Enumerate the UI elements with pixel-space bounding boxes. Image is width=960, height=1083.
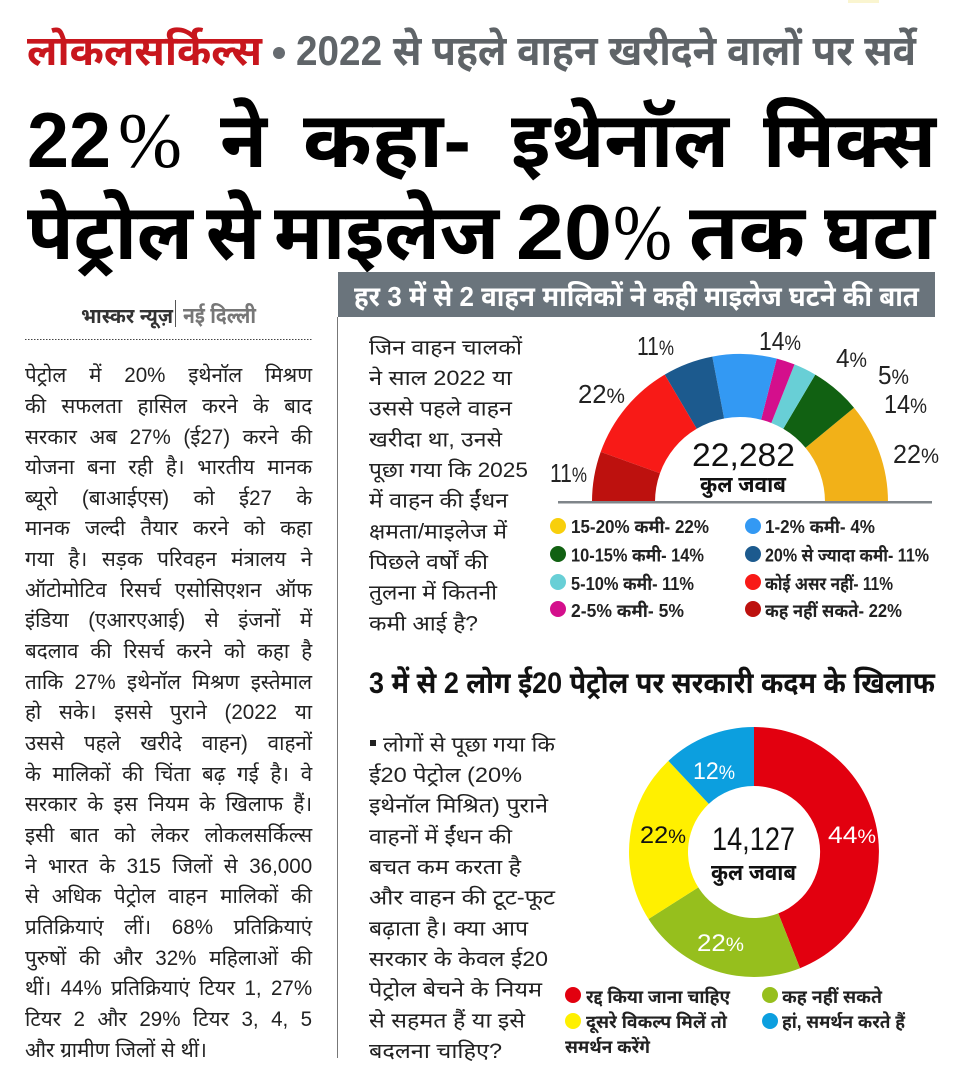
article body text: सरकार के इस नियम के खिलाफ हैं। <box>25 793 312 816</box>
article body text: पुरुषों की और 32% महिलाओं की <box>25 947 312 970</box>
main headline: इथेनॉल <box>511 96 730 184</box>
legend: mileage: कोई असर नहीं- 11% <box>765 573 893 594</box>
donut chart: कुल जवाब <box>711 860 796 886</box>
article body text: और ग्रामीण जिलों से थीं। <box>25 1039 207 1062</box>
semi-donut chart: कुल जवाब <box>700 472 786 498</box>
question text: E20: बढ़ाता है। क्या आप <box>369 915 529 940</box>
donut chart: 44% <box>828 822 876 849</box>
main headline: % <box>118 97 182 184</box>
byline: नई दिल्ली <box>183 303 256 328</box>
question text: mileage: पिछले वर्षों की <box>369 550 489 574</box>
kicker heading: लोकलसर्किल्स <box>27 27 263 74</box>
kicker heading: 2022 से पहले वाहन खरीदने वालों पर सर्वे <box>296 27 918 74</box>
legend: E20 <box>565 986 906 1057</box>
question text: E20: पेट्रोल बेचने के नियम <box>369 978 542 1002</box>
article body text: प्रतिक्रियाएं लीं। 68% प्रतिक्रियाएं <box>25 916 312 939</box>
byline <box>81 300 256 329</box>
main headline: से <box>206 188 261 276</box>
article body text: टियर 2 और 29% टियर 3, 4, 5 <box>25 1008 312 1031</box>
question text: E20 <box>369 732 556 1063</box>
question text: E20: और वाहन की टूट-फूट <box>369 886 555 911</box>
legend: mileage: कह नहीं सकते- 22% <box>765 600 902 621</box>
byline: भास्कर न्यूज़ <box>81 305 173 329</box>
question text: E20: वाहनों में ईंधन की <box>369 824 513 848</box>
article body text: इसी बात को लेकर लोकलसर्किल्स <box>25 824 312 847</box>
article body text: सरकार अब 27% (ई27) करने की <box>25 426 312 448</box>
question text: E20: बदलना चाहिए? <box>369 1039 502 1063</box>
semi-donut chart: 14% <box>884 389 927 419</box>
article body text: थीं। 44% प्रतिक्रियाएं टियर 1, 27% <box>25 977 312 1000</box>
article body text: बदलाव की रिसर्च करने को कहा है <box>25 640 312 663</box>
main headline: 20 <box>516 188 612 276</box>
question text: E20: बचत कम करता है <box>369 854 522 879</box>
question text: E20: इथेनॉल मिश्रित) पुराने <box>369 794 548 819</box>
semi-donut chart <box>550 326 939 504</box>
main headline: 22 <box>27 96 111 184</box>
main headline: मिक्स <box>763 96 937 184</box>
question text: mileage <box>369 335 528 635</box>
article body text: पेट्रोल में 20% इथेनॉल मिश्रण <box>25 364 312 387</box>
article body text: इंडिया (एआरएआई) से इंजनों में <box>25 609 312 632</box>
legend: mileage: 15-20% कमी- 22% <box>571 517 709 537</box>
main headline: पेट्रोल <box>27 188 194 277</box>
legend: E20: रद्द किया जाना चाहिए <box>586 987 731 1007</box>
legend: mileage <box>550 517 929 621</box>
question text: mileage: में वाहन की ईंधन <box>369 489 508 513</box>
semi-donut chart: 22,282 <box>692 437 795 473</box>
question text: E20: सरकार के केवल ई20 <box>369 947 548 971</box>
article body text: ताकि 27% इथेनॉल मिश्रण इस्तेमाल <box>25 671 312 694</box>
donut chart <box>629 727 879 977</box>
question text: E20: ई20 पेट्रोल (20% <box>369 763 522 787</box>
semi-donut chart: 22% <box>893 439 939 469</box>
question text: E20: से सहमत हैं या इसे <box>369 1008 526 1032</box>
donut chart: 12% <box>693 758 735 785</box>
question text: mileage: ने साल 2022 या <box>369 366 513 390</box>
semi-donut chart: 14% <box>759 326 801 356</box>
question text: mileage: तुलना में कितनी <box>369 581 498 606</box>
question text: mileage: कमी आई है? <box>369 610 478 635</box>
article body text: की सफलता हासिल करने के बाद <box>25 395 312 418</box>
legend: mileage: 20% से ज्यादा कमी- 11% <box>765 546 929 566</box>
question text: E20: लोगों से पूछा गया कि <box>383 732 556 757</box>
article body text: गया है। सड़क परिवहन मंत्रालय ने <box>25 548 312 571</box>
question text: mileage: पूछा गया कि 2025 <box>369 458 528 483</box>
question text: mileage: जिन वाहन चालकों <box>369 335 523 359</box>
legend: E20: हां, समर्थन करते हैं <box>782 1011 906 1032</box>
article body text <box>25 363 312 1062</box>
donut chart: 22% <box>640 822 686 849</box>
legend: mileage: 2-5% कमी- 5% <box>571 601 684 621</box>
legend: mileage: 5-10% कमी- 11% <box>571 574 694 594</box>
legend: mileage: 1-2% कमी- 4% <box>765 517 875 537</box>
article body text: ब्यूरो (बाआईएस) को ई27 के <box>25 487 312 510</box>
legend: E20: कह नहीं सकते <box>782 986 883 1007</box>
panel heading: mileage: हर 3 में से 2 वाहन मालिकों ने कही माइलेज घटने की बात <box>354 279 920 312</box>
main headline: ने <box>220 96 269 184</box>
article body text: ने भारत के 315 जिलों से 36,000 <box>25 855 312 878</box>
legend: mileage: 10-15% कमी- 14% <box>571 546 704 566</box>
question text: mileage: खरीदा था, उनसे <box>369 427 503 451</box>
article body text: के मालिकों की चिंता बढ़ गई है। वे <box>25 763 312 786</box>
semi-donut chart: 4% <box>836 343 867 373</box>
main headline: घटा <box>824 188 937 276</box>
donut chart: 22% <box>697 930 744 957</box>
semi-donut chart: 11% <box>637 331 674 361</box>
main headline: माइलेज <box>274 188 501 276</box>
article body text: मानक जल्दी तैयार करने को कहा <box>25 517 312 540</box>
donut chart: 14,127 <box>712 821 795 857</box>
main headline <box>27 96 937 277</box>
kicker heading <box>27 27 918 74</box>
article body text: से अधिक पेट्रोल वाहन मालिकों की <box>25 885 312 908</box>
legend: E20: समर्थन करेंगे <box>565 1036 651 1057</box>
semi-donut chart: 11% <box>550 458 587 488</box>
semi-donut chart: 5% <box>878 360 909 390</box>
article body text: ऑटोमोटिव रिसर्च एसोसिएशन ऑफ <box>25 579 312 602</box>
article body text: हो सके। इससे पुराने (2022 या <box>25 701 312 724</box>
main headline: तक <box>689 188 806 276</box>
legend: E20: दूसरे विकल्प मिलें तो <box>586 1011 728 1034</box>
article body text: उससे पहले खरीदे वाहन) वाहनों <box>25 732 312 755</box>
question text: mileage: उससे पहले वाहन <box>369 397 512 421</box>
main headline: कहा- <box>303 96 471 184</box>
panel heading: mileage <box>338 272 935 317</box>
semi-donut chart: 22% <box>578 379 625 409</box>
main headline: % <box>613 189 672 276</box>
article body text: योजना बना रही है। भारतीय मानक <box>25 456 312 479</box>
question text: mileage: क्षमता/माइलेज में <box>369 519 507 543</box>
